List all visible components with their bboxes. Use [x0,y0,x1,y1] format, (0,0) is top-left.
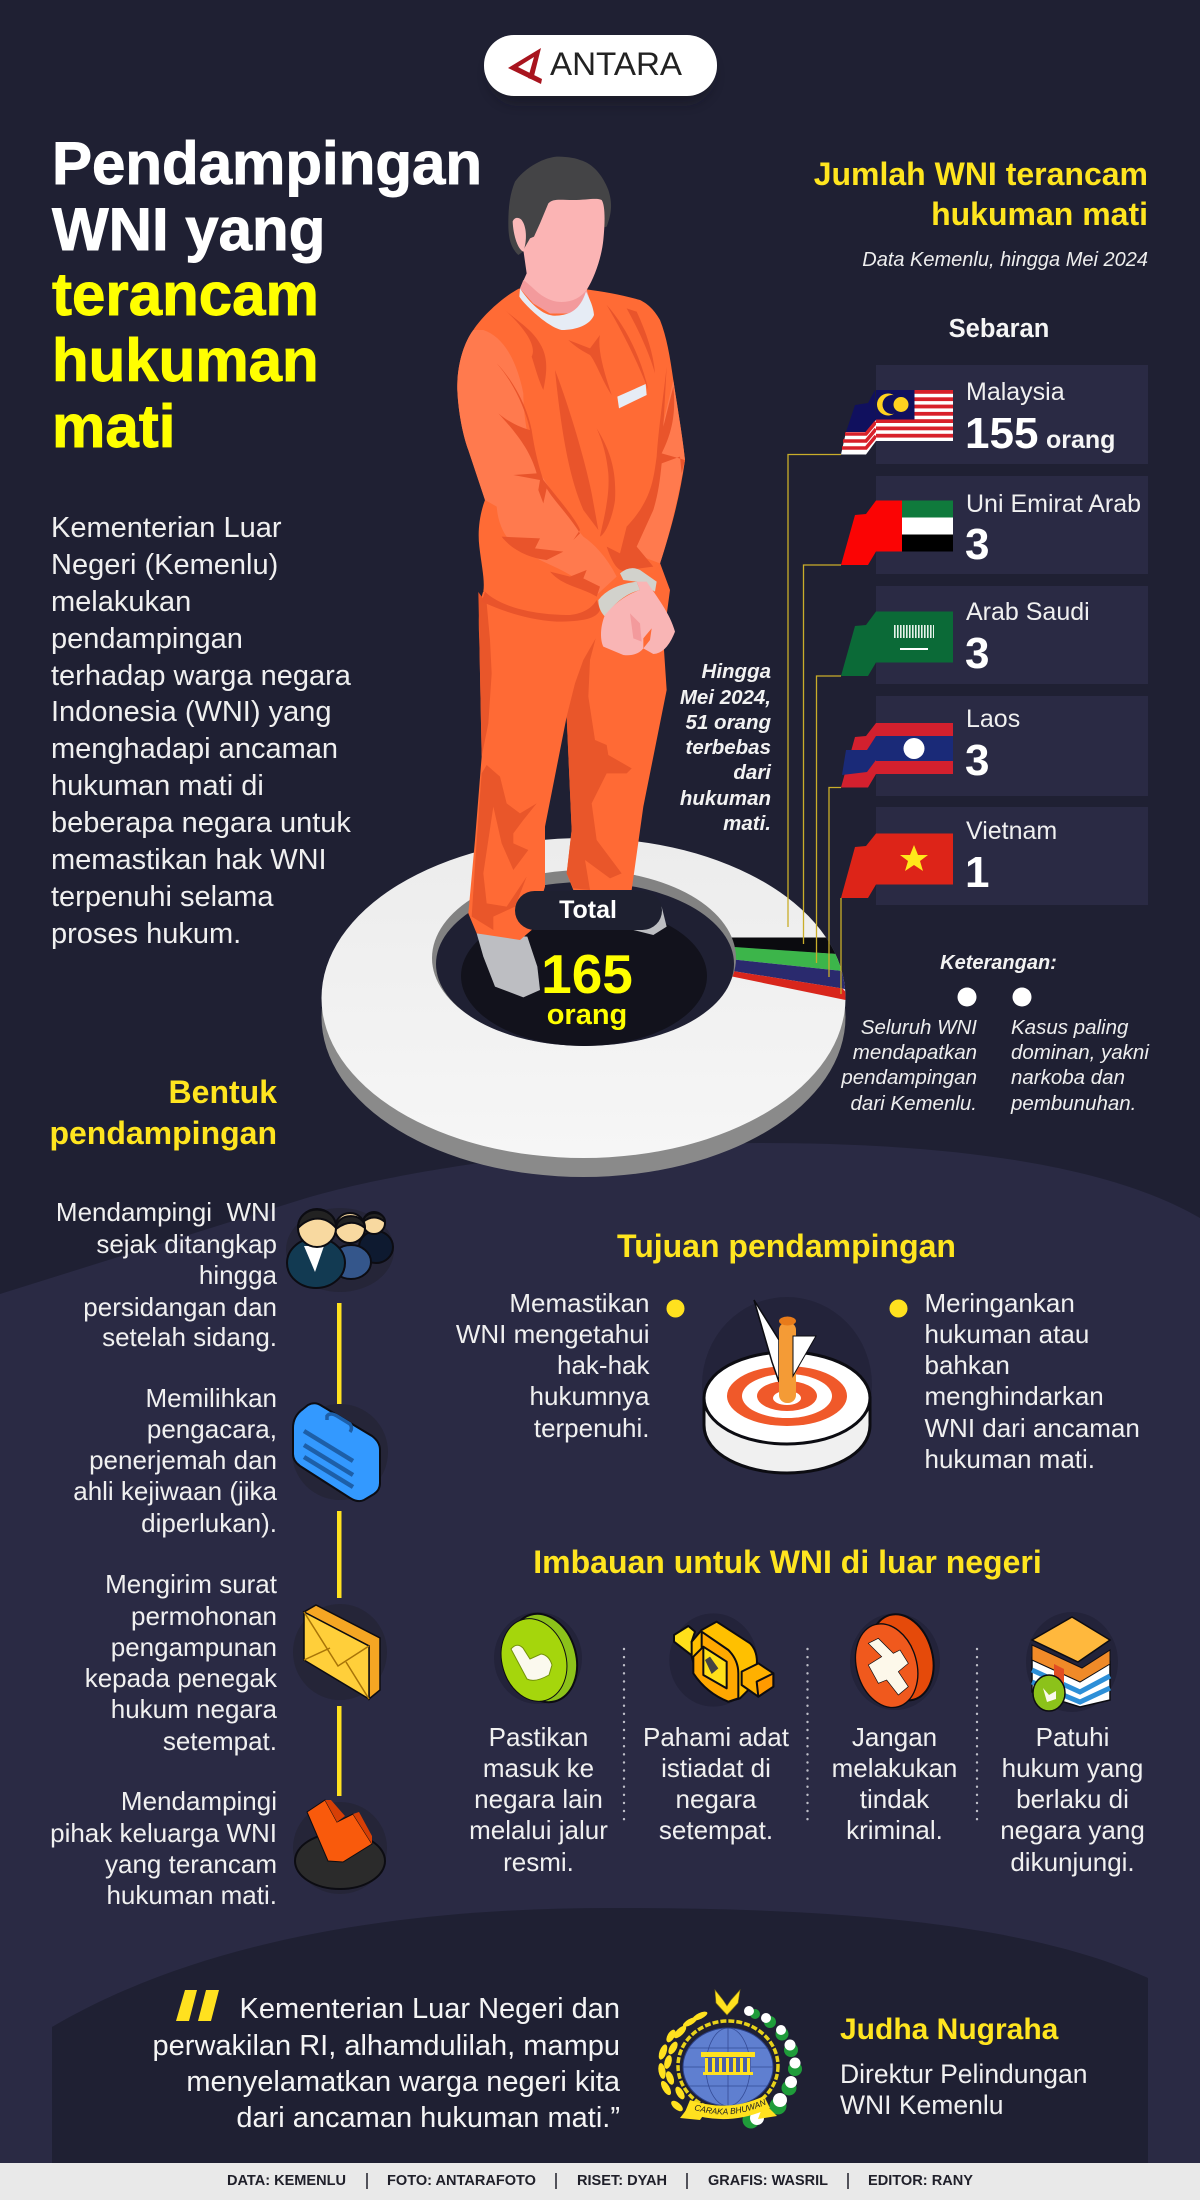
legend dot and note 2: Kasus paling [1011,1016,1129,1039]
callout: 51 orang terbebas: 51 orang [686,711,771,734]
text: mengirim surat: hukum negara [111,1694,278,1724]
total pill [515,891,662,930]
icon: envelope [293,1604,387,1700]
footer credits [0,2163,1200,2200]
intro text block: pendampingan [51,623,243,655]
item: pahami adat: Pahami adat [643,1722,790,1752]
legend dot and note 1: dari Kemenlu. [851,1092,977,1115]
legend dot and note 2: pembunuhan. [1010,1092,1136,1115]
icon: target [702,1297,872,1473]
legend dot and note 2 [1010,988,1150,1115]
total number: orang [547,999,627,1031]
title: hukuman [52,327,319,394]
icon: people [286,1208,394,1292]
text: mengirim surat: setempat. [163,1726,277,1756]
data source note: Data Kemenlu, hingga Mei 2024 [862,249,1148,271]
garuda [715,1990,740,2015]
goal text 1: terpenuhi. [534,1413,650,1443]
total pill: Total [559,896,617,924]
panel: Uni Emirat Arab: 3 [965,520,989,569]
heading: jumlah WNI: Jumlah WNI terancam [814,156,1148,192]
text: mendampingi keluarga: pihak keluarga WNI [50,1818,277,1848]
callout: 51 orang terbebas: Hingga [702,660,771,683]
goal text 2: menghindarkan [924,1381,1104,1411]
text: mengirim surat: Mengirim surat [105,1569,278,1599]
goal text 2: bahkan [924,1350,1010,1380]
item: patuhi hukum [1000,1612,1145,1877]
text: mengirim surat: pengampunan [111,1632,277,1662]
text: memilihkan pengacara: pengacara, [147,1414,277,1444]
callout: 51 orang terbebas: dari [733,761,772,784]
legs and shoes [468,563,670,997]
keterangan heading: Keterangan: [940,952,1057,974]
donut chart: total 165 [322,838,860,1177]
cotton [742,2009,802,2128]
heading: jumlah WNI: hukuman mati [931,196,1148,232]
quote text: menyelamatkan warga negeri kita [186,2066,621,2098]
panel: Malaysia: 155 [965,409,1038,458]
item: patuhi hukum: negara yang [1000,1815,1145,1845]
item: jangan kriminal: Jangan [852,1722,937,1752]
panel: Laos [841,696,1148,796]
heading: tujuan pendampingan: Tujuan pendampingan [617,1228,956,1264]
text: mengirim surat: permohonan [131,1601,277,1631]
item: pahami adat: istiadat di [661,1753,771,1783]
legend dot and note 1: Seluruh WNI [861,1016,977,1039]
text: mengirim surat: kepada penegak [85,1663,278,1693]
title: terancam [52,261,319,328]
icon: quote mark [176,1990,219,2021]
connector lines [788,454,841,994]
globe [683,2028,773,2106]
callout: 51 orang terbebas: terbebas [686,736,771,759]
intro text block: melakukan [51,586,191,618]
heading: imbauan: Imbauan untuk WNI di luar negeri [533,1544,1042,1580]
icon: helping hand [293,1800,387,1894]
intro text block: menghadapi ancaman [51,733,338,765]
title: mati [52,393,175,460]
text: mendampingi keluarga: Mendampingi [121,1786,277,1816]
logo: ANTARA: ANTARA [550,46,683,82]
quote text: perwakilan RI, alhamdulilah, mampu [153,2030,620,2062]
item: pastikan masuk: Pastikan [489,1722,588,1752]
item: pastikan masuk: resmi. [503,1847,574,1877]
item: jangan kriminal: kriminal. [846,1815,943,1845]
speaker name: Judha Nugraha [840,2013,1059,2046]
text: mendampingi keluarga: hukuman mati. [106,1880,277,1910]
legend dot and note 2: narkoba dan [1011,1066,1125,1089]
goal text 1: WNI mengetahui [456,1319,650,1349]
logo: ANTARA [484,35,717,102]
panel: Arab Saudi: 3 [965,629,989,678]
text: mendampingi keluarga: yang terancam [105,1849,277,1879]
item: pastikan masuk: negara lain [474,1784,603,1814]
panel: Malaysia: Malaysia [966,378,1065,406]
heading: bentuk pendampingan: pendampingan [49,1115,277,1151]
panel: Uni Emirat Arab [841,476,1148,574]
icon: briefcase [292,1403,388,1501]
item: pastikan masuk: masuk ke [483,1753,594,1783]
text: memilihkan pengacara: diperlukan). [141,1508,277,1538]
footer credits: EDITOR: RANY [868,2173,973,2189]
prisoner figure [457,157,685,997]
item: jangan kriminal: melakukan [832,1753,957,1783]
panel: Malaysia: orang [1046,426,1115,454]
item: jangan kriminal [832,1607,957,1845]
title: WNI yang [52,196,325,263]
text: memilihkan pengacara: ahli kejiwaan (jika [73,1476,278,1506]
item: pastikan masuk [469,1606,608,1877]
text: mendampingi WNI: Mendampingi WNI [56,1197,277,1227]
goal text 1 [456,1288,684,1443]
callout: 51 orang terbebas: mati. [723,812,771,835]
item: pastikan masuk: melalui jalur [469,1815,608,1845]
text: mendampingi WNI: hingga [199,1260,278,1290]
panel: Vietnam: Vietnam [966,817,1057,845]
wheat [657,2010,709,2113]
speaker role: WNI Kemenlu [840,2090,1003,2120]
callout: 51 orang terbebas: hukuman [680,787,771,810]
item: jangan kriminal: tindak [860,1784,930,1814]
footer credits: FOTO: ANTARAFOTO [387,2173,536,2189]
legend dot and note 1: mendapatkan [853,1041,977,1064]
goal text 2: Meringankan [924,1288,1075,1318]
ribbon [680,2105,705,2120]
text: mendampingi WNI: sejak ditangkap [96,1229,277,1259]
legend dot and note 2: dominan, yakni [1011,1041,1150,1064]
goal text 2: hukuman mati. [924,1444,1095,1474]
intro text block: proses hukum. [51,918,241,950]
footer credits: RISET: DYAH [577,2173,667,2189]
speaker role: Direktur Pelindungan [840,2059,1087,2089]
chain [678,2021,778,2111]
callout: 51 orang terbebas: Mei 2024, [680,686,771,709]
title: Pendampingan [52,130,482,197]
text: memilihkan pengacara: penerjemah dan [89,1445,277,1475]
legend dot and note 1 [840,988,977,1115]
item: patuhi hukum: dikunjungi. [1010,1847,1135,1877]
connector: briefcase to envelope [337,1511,342,1598]
quote text: dari ancaman hukuman mati.” [236,2102,620,2134]
intro text block: Kementerian Luar [51,512,282,544]
building [701,2052,755,2057]
heading: sebaran: Sebaran [949,315,1049,343]
panel: Uni Emirat Arab: Uni Emirat Arab [966,490,1141,518]
panel: Laos: 3 [965,736,989,785]
item: patuhi hukum: Patuhi [1036,1722,1109,1752]
goal text 1: hukumnya [530,1381,650,1411]
goal text 1: Memastikan [509,1288,650,1318]
shirt [457,288,685,655]
panel: Malaysia [841,365,1148,464]
item: patuhi hukum: hukum yang [1002,1753,1143,1783]
text: mendampingi WNI: persidangan dan [83,1292,277,1322]
intro text block: Negeri (Kemenlu) [51,549,278,581]
footer credits: DATA: KEMENLU [227,2173,346,2189]
goal text 2: WNI dari ancaman [924,1413,1140,1443]
connector: people to briefcase [337,1303,342,1404]
head [508,157,611,330]
emblem: Kemenlu [658,1989,802,2128]
legend dot and note 1: pendampingan [840,1066,977,1089]
text: mendampingi WNI: setelah sidang. [102,1322,277,1352]
text: memilihkan pengacara: Memilihkan [146,1383,277,1413]
panel: Vietnam [841,807,1148,905]
item: pahami adat: negara [676,1784,757,1814]
item: pahami adat: setempat. [659,1815,773,1845]
footer credits: GRAFIS: WASRIL [708,2173,828,2189]
intro text block: terpenuhi selama [51,881,274,913]
panel: Arab Saudi [841,586,1148,684]
total number: 165 [541,943,633,1005]
panel: Laos: Laos [966,705,1020,733]
panel: Vietnam: 1 [965,848,989,897]
intro text block: terhadap warga negara [51,660,352,692]
intro text block: beberapa negara untuk [51,807,351,839]
heading: bentuk pendampingan: Bentuk [169,1074,277,1110]
goal text 1: hak-hak [557,1350,650,1380]
intro text block: memastikan hak WNI [51,844,327,876]
item: patuhi hukum: berlaku di [1016,1784,1129,1814]
item: pahami adat [643,1613,790,1845]
goal text 2 [890,1288,1140,1474]
intro text block: Indonesia (WNI) yang [51,696,331,728]
emblem: Kemenlu: CARAKA BHUWANA [694,2098,766,2114]
quote text: Kementerian Luar Negeri dan [240,1993,620,2025]
intro text block: hukuman mati di [51,770,264,802]
goal text 2: hukuman atau [924,1319,1089,1349]
panel: Arab Saudi: Arab Saudi [966,598,1090,626]
connector: envelope to hand [337,1706,342,1796]
dividers [624,1649,977,1820]
